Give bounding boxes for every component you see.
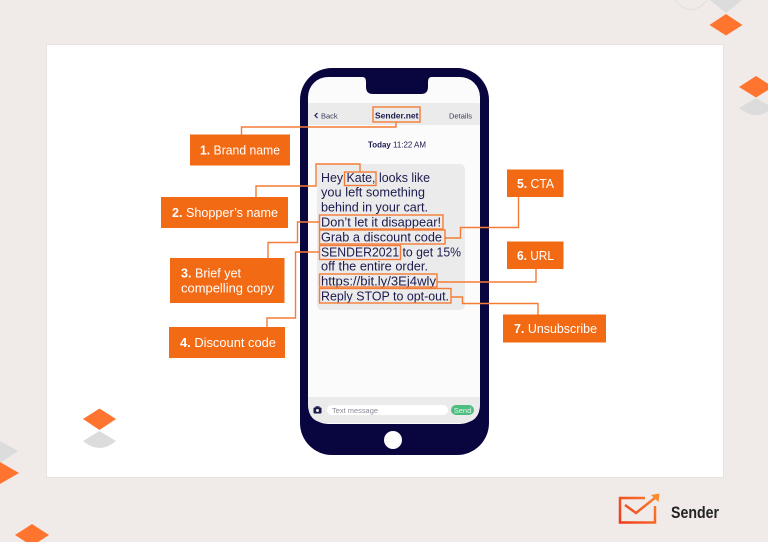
callout 5: CTA <box>445 170 564 238</box>
message text: Don’t let it disappear! <box>321 214 441 230</box>
highlight frames <box>320 107 451 303</box>
header bar: Details <box>449 112 472 120</box>
card diamonds icon <box>83 408 116 448</box>
callout 2: shopper's name: 2. Shopper’s name <box>172 205 278 220</box>
phone notch <box>362 77 432 94</box>
message text: Hey Kate, looks like <box>321 170 430 185</box>
callout 5: CTA: 5. CTA <box>517 176 554 191</box>
callout 2: shopper's name <box>161 164 360 228</box>
callout 3: brief yet compelling copy <box>170 222 320 303</box>
decorative diamonds: top right <box>675 0 768 115</box>
phone <box>300 68 489 455</box>
message text: you left something <box>321 184 425 200</box>
callout 6: URL: 6. URL <box>517 248 554 263</box>
white card <box>46 44 724 478</box>
callout 1: brand name: 1. Brand name <box>200 142 280 158</box>
decorative diamonds: bottom left <box>0 441 49 542</box>
callout 6: URL <box>437 242 564 282</box>
phone screen <box>308 77 480 424</box>
input bar: Send <box>454 406 471 415</box>
callout 4: discount code: 4. Discount code <box>180 335 276 350</box>
message text: https://bit.ly/3Ej4wly <box>321 274 437 288</box>
icon: envelope with arrow <box>620 494 660 522</box>
Sender logo <box>620 494 719 522</box>
header bar: Sender.net <box>375 110 419 120</box>
header bar: Back <box>321 112 338 120</box>
input bar: Text message <box>332 406 378 415</box>
callout 3: brief yet compelling copy: compelling copy <box>181 280 274 296</box>
phone body <box>300 68 489 455</box>
home button <box>384 431 402 449</box>
callout 1: brand name <box>190 122 396 166</box>
message text: Grab a discount code <box>321 230 442 244</box>
timestamp: Today 11:22 AM <box>368 140 426 150</box>
callout 3: brief yet compelling copy: 3. Brief yet <box>181 266 241 280</box>
message text <box>321 170 461 304</box>
callout 7: unsubscribe: 7. Unsubscribe <box>514 321 597 336</box>
callout 4: discount code <box>169 252 320 358</box>
message text: behind in your cart. <box>321 200 428 214</box>
input bar <box>308 397 480 423</box>
message text: off the entire order. <box>321 258 428 274</box>
message text: SENDER2021 to get 15% <box>321 244 461 260</box>
callout 7: unsubscribe <box>451 297 606 342</box>
message text: Reply STOP to opt-out. <box>321 288 449 304</box>
logo wordmark: Sender <box>671 503 719 522</box>
header bar <box>308 103 480 125</box>
message bubble <box>317 164 465 310</box>
icon: camera <box>314 406 322 414</box>
